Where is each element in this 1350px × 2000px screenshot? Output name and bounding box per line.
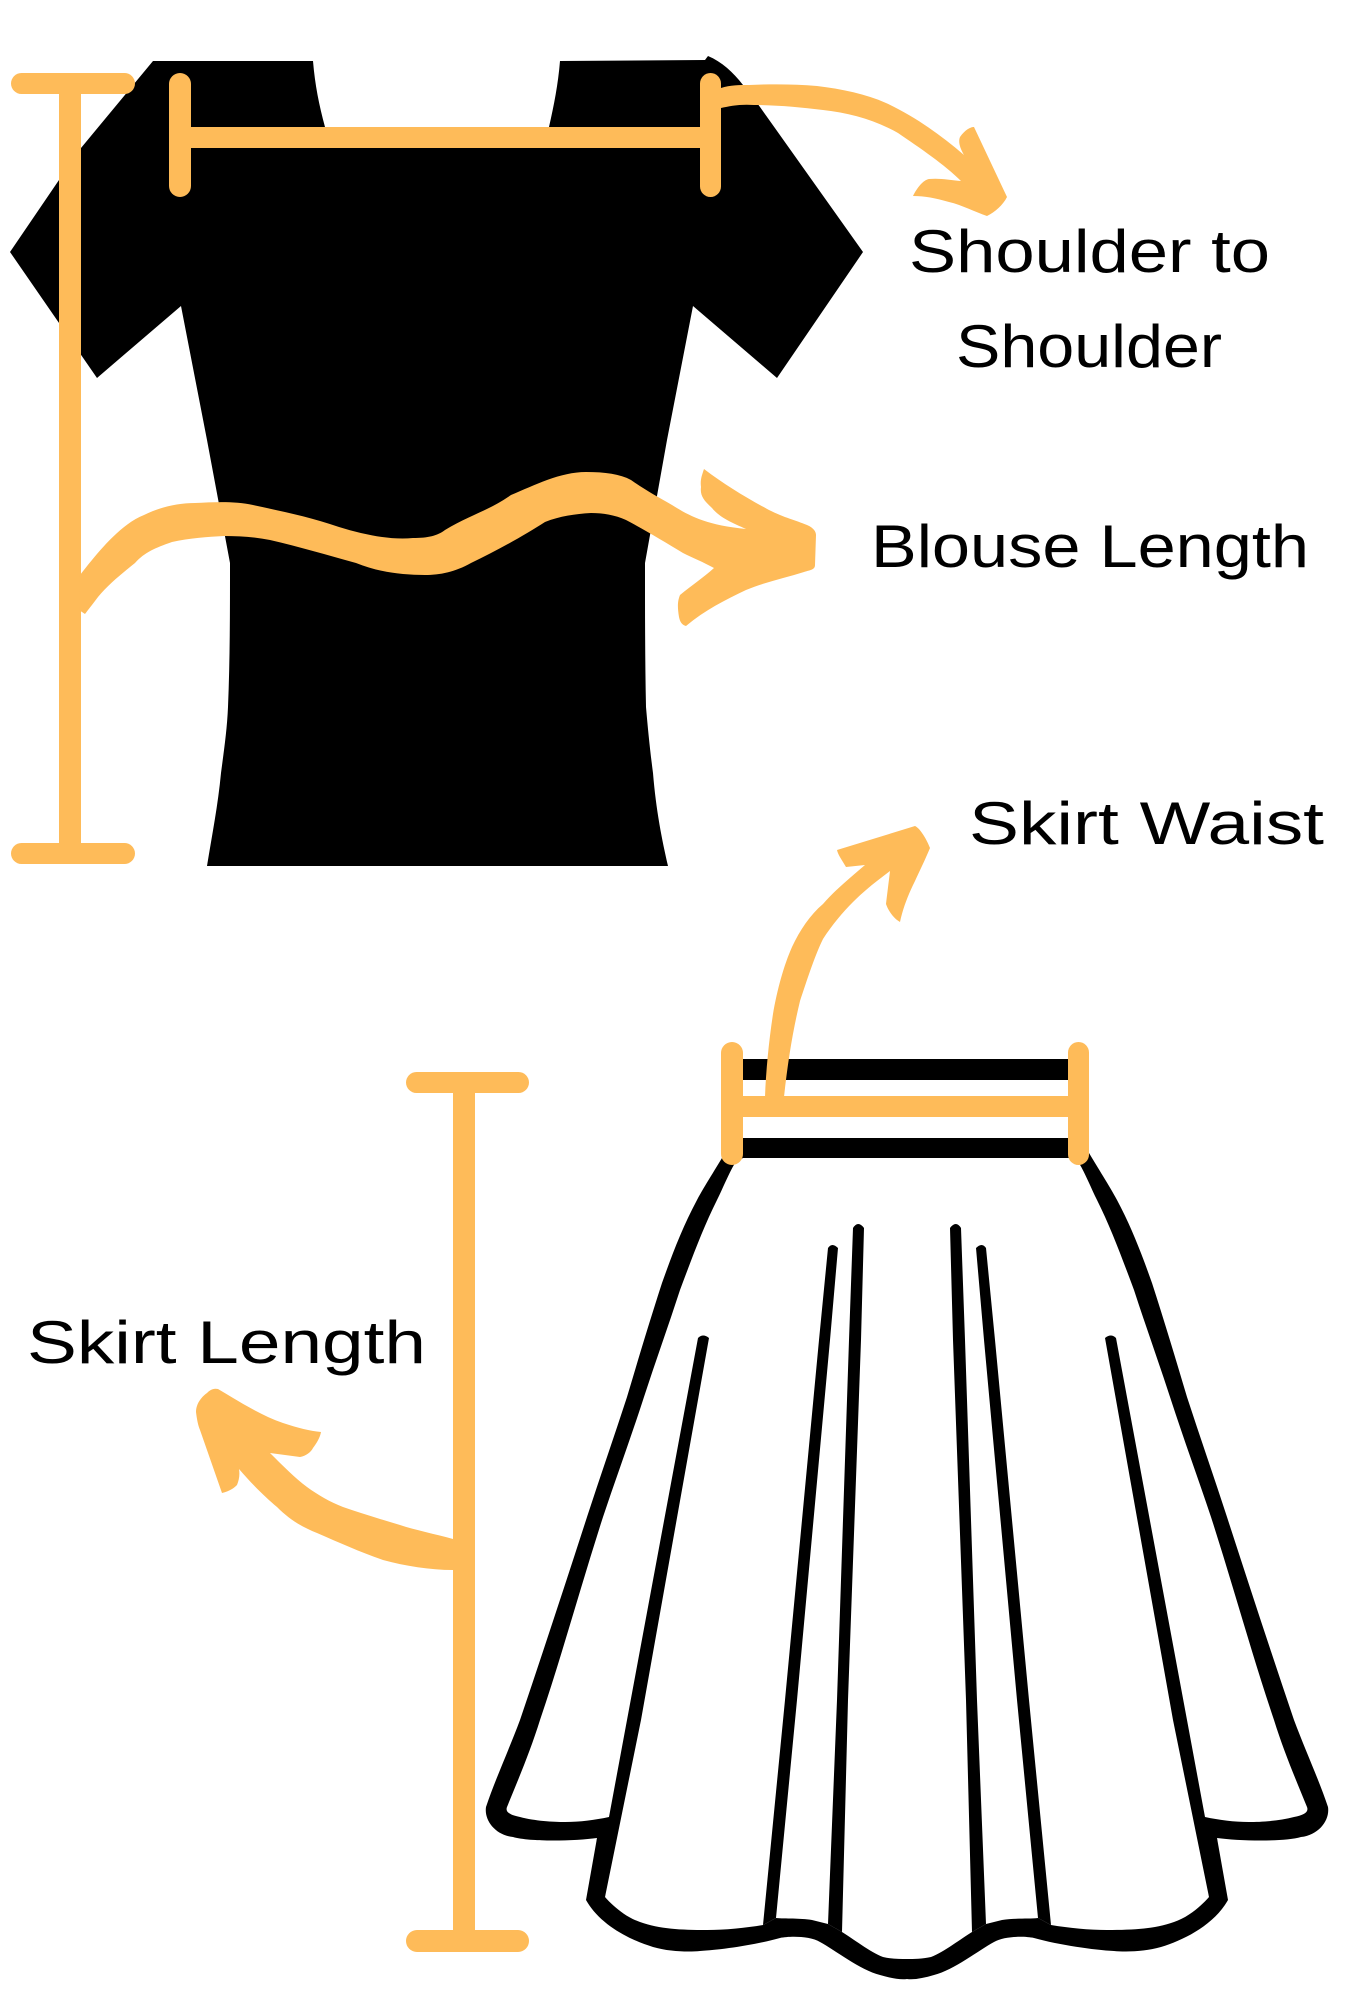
skirt length measuring bar bbox=[406, 1072, 529, 1952]
label: shoulder to shoulder bbox=[909, 218, 1270, 380]
arrow: skirt waist bbox=[765, 826, 930, 1097]
blouse silhouette bbox=[10, 56, 863, 866]
skirt waist measuring bar bbox=[721, 1042, 1089, 1165]
label: shoulder to shoulder: Shoulder bbox=[956, 313, 1222, 380]
label: skirt waist: Skirt Waist bbox=[969, 790, 1324, 857]
arrow: blouse length bbox=[79, 469, 816, 626]
skirt outline bbox=[486, 1148, 1328, 1979]
panel: blouse measurements bbox=[10, 56, 1309, 866]
label: shoulder to shoulder: Shoulder to bbox=[909, 218, 1270, 285]
arrow: shoulder to shoulder bbox=[721, 84, 1007, 216]
arrow: skirt length bbox=[196, 1389, 453, 1570]
panel: skirt measurements bbox=[27, 790, 1328, 1979]
blouse length measuring bar bbox=[11, 73, 135, 864]
skirt waistband stripes bbox=[743, 1059, 1068, 1158]
shoulder to shoulder measuring bar bbox=[169, 73, 721, 197]
label: skirt length: Skirt Length bbox=[27, 1309, 426, 1376]
skirt pleat lines bbox=[592, 1224, 1222, 1932]
label: blouse length: Blouse Length bbox=[871, 513, 1309, 580]
